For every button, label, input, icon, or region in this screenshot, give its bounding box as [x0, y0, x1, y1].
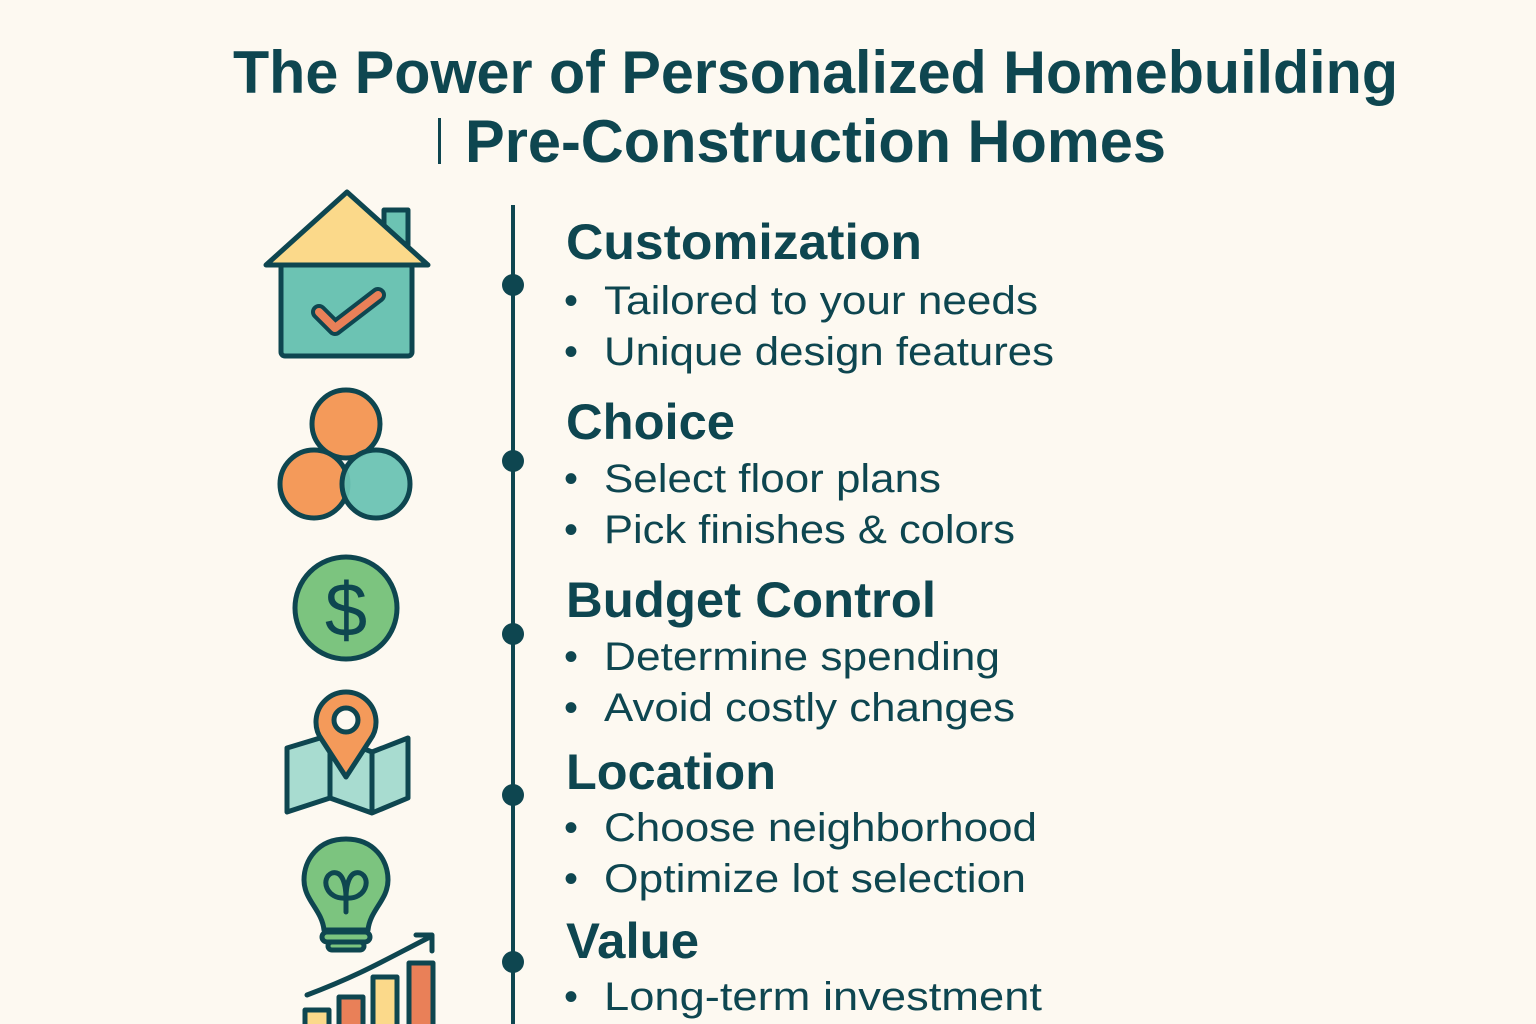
section: Budget Control — [564, 572, 1015, 730]
icon: dollar coin: $ — [325, 568, 367, 653]
section: Choice: Select floor plans — [604, 457, 941, 501]
icon: dollar coin — [295, 557, 397, 659]
section: Customization: • — [564, 330, 578, 374]
title — [233, 39, 1398, 175]
icon: lightbulb with sprout — [304, 839, 388, 950]
section: Customization — [564, 214, 1054, 374]
section: Location: Choose neighborhood — [604, 806, 1037, 850]
section: Budget Control: Budget Control — [566, 572, 936, 628]
section: Choice: Pick finishes & colors — [604, 508, 1015, 552]
section: Budget Control: • — [564, 635, 578, 679]
section: Customization: Customization — [566, 214, 922, 270]
section: Location: • — [564, 857, 578, 901]
icon: house with check — [266, 192, 428, 356]
section: Choice: • — [564, 457, 578, 501]
section: Location: Location — [566, 744, 776, 800]
section: Customization: • — [564, 279, 578, 323]
section: Location: • — [564, 806, 578, 850]
icon: bar chart growth — [305, 935, 433, 1024]
timeline line — [502, 205, 524, 1024]
section: Budget Control: Avoid costly changes — [604, 686, 1015, 730]
section: Budget Control: • — [564, 686, 578, 730]
icon: map with pin — [287, 692, 408, 813]
section: Customization: Unique design features — [604, 330, 1054, 374]
section: Value: Value — [566, 913, 699, 969]
section: Location — [564, 744, 1037, 901]
section: Budget Control: Determine spending — [604, 635, 1000, 679]
section: Value: • — [564, 975, 578, 1019]
section: Value — [564, 913, 1042, 1019]
section: Choice — [564, 394, 1015, 552]
section: Choice: • — [564, 508, 578, 552]
section: Choice: Choice — [566, 394, 735, 450]
section: Value: Long-term investment — [604, 975, 1042, 1019]
title: The Power of Personalized Homebuilding — [233, 39, 1398, 106]
section: Customization: Tailored to your needs — [604, 279, 1038, 323]
icon: color circles — [280, 390, 410, 518]
title: Pre-Construction Homes — [465, 108, 1166, 175]
section: Location: Optimize lot selection — [604, 857, 1026, 901]
